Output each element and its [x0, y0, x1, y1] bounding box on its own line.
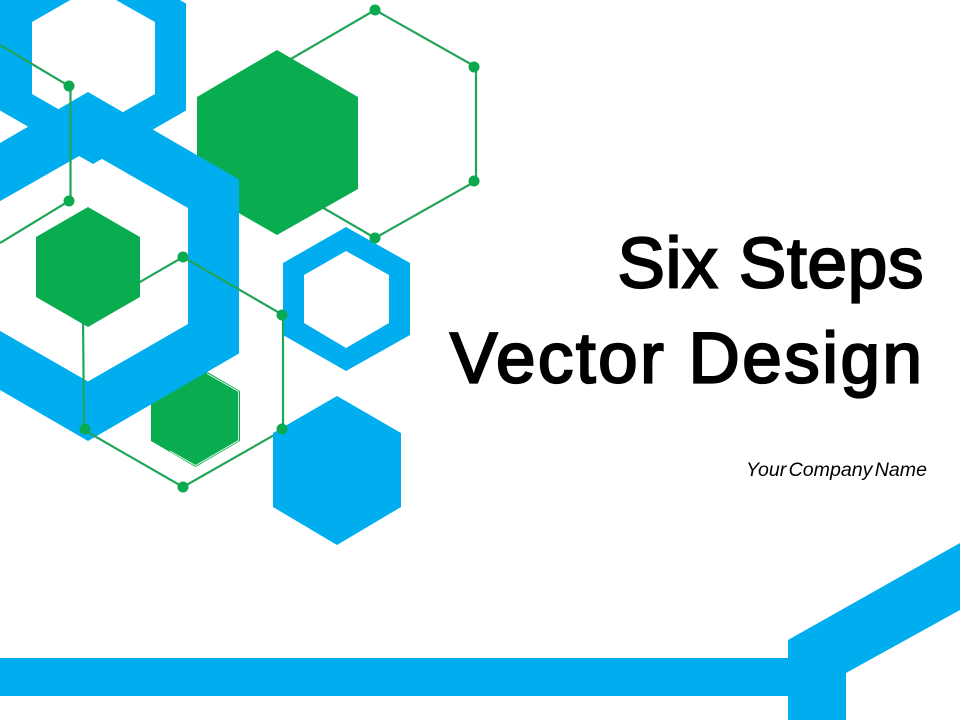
top blue hexagon ring [0, 0, 186, 164]
upper left connector with nodes [0, 45, 74, 243]
title line 1: Six Steps [618, 224, 924, 304]
large green hexagon [197, 50, 358, 235]
node on small blue ring [370, 232, 380, 244]
center green hexagon [36, 207, 140, 327]
solid blue hexagon [273, 396, 401, 545]
bottom blue bar [0, 658, 790, 696]
title line 2: Vector Design [450, 320, 922, 398]
lower outline hexagon [83, 257, 283, 487]
lower green hexagon with white inset line [151, 365, 240, 467]
lower hexagon nodes [80, 252, 288, 492]
company name: Your Company Name [746, 460, 927, 481]
upper outline hexagon with nodes [277, 4, 480, 238]
small blue hexagon ring [283, 227, 410, 371]
bottom right blue angled bar [788, 543, 960, 720]
large blue hexagon ring [0, 92, 239, 441]
